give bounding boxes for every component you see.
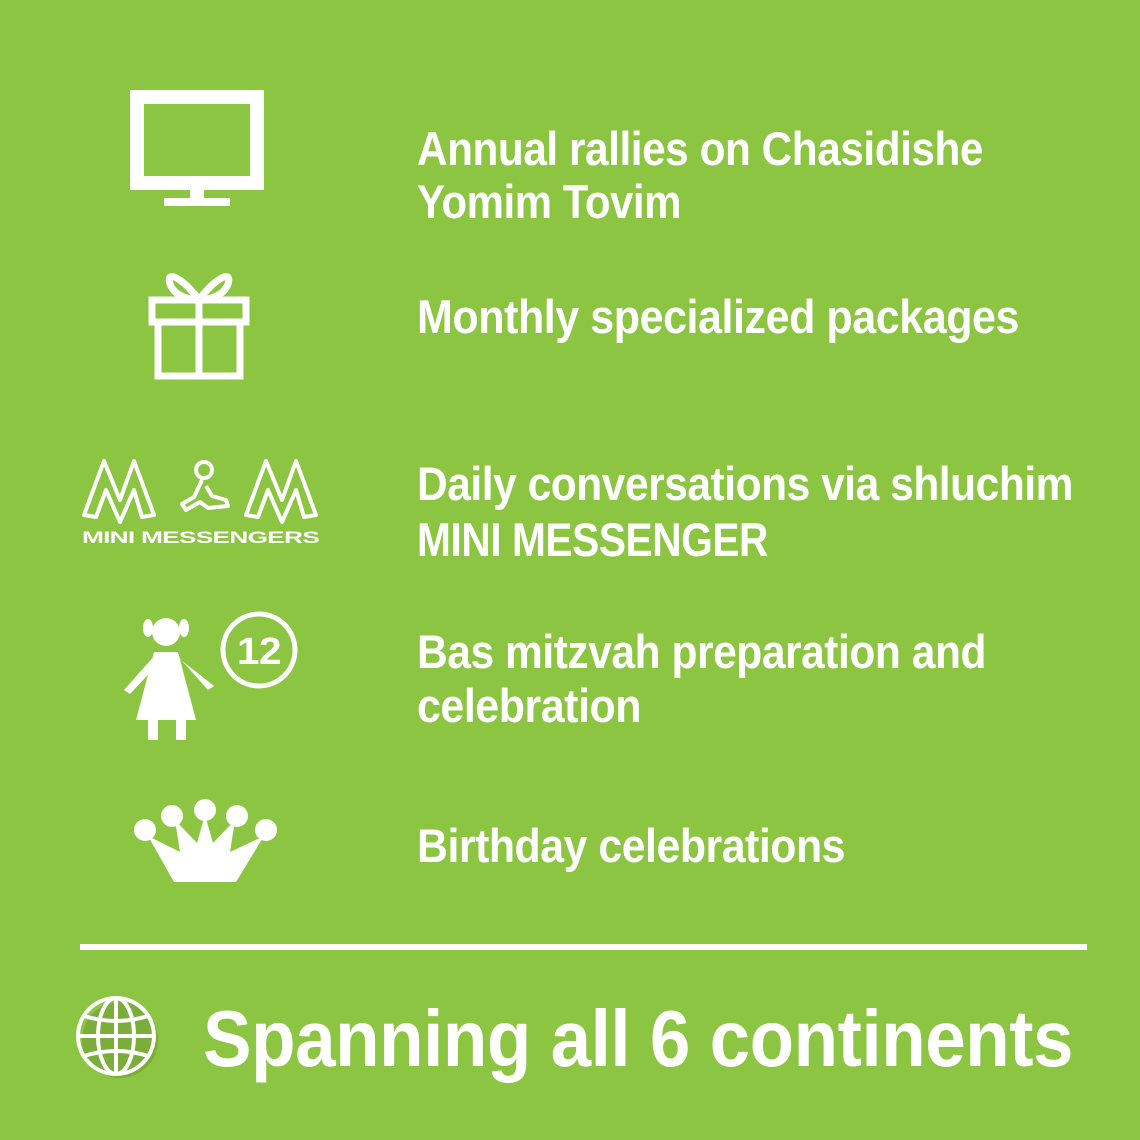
icon: mini messengers logo: [82, 461, 319, 547]
text: annual rallies: Annual rallies on Chasidishe: [417, 122, 983, 175]
title: spanning all 6 continents: Spanning all 6 continents: [203, 994, 1073, 1083]
text: annual rallies: Yomim Tovim: [417, 175, 681, 228]
text: birthday: Birthday celebrations: [417, 819, 845, 872]
text: monthly packages: Monthly specialized packages: [417, 290, 1019, 343]
text: daily conversations: Daily conversations via shluchim: [417, 457, 1073, 510]
icon: globe: [78, 998, 158, 1078]
icon: crown: [134, 799, 277, 882]
icon: girl with 12: [124, 614, 295, 740]
text: bas mitzvah: [417, 625, 986, 732]
text: bas mitzvah: celebration: [417, 679, 641, 732]
icon: mini messengers logo: MINI MESSENGERS: [82, 528, 319, 547]
text: daily conversations: MINI MESSENGER: [417, 513, 768, 566]
icon: gift: [152, 277, 246, 376]
text: daily conversations: [417, 457, 1073, 566]
icon: monitor: [130, 90, 264, 206]
text: annual rallies: [417, 122, 983, 228]
icon: girl with 12: 12: [237, 631, 281, 673]
text: bas mitzvah: Bas mitzvah preparation and: [417, 625, 986, 678]
